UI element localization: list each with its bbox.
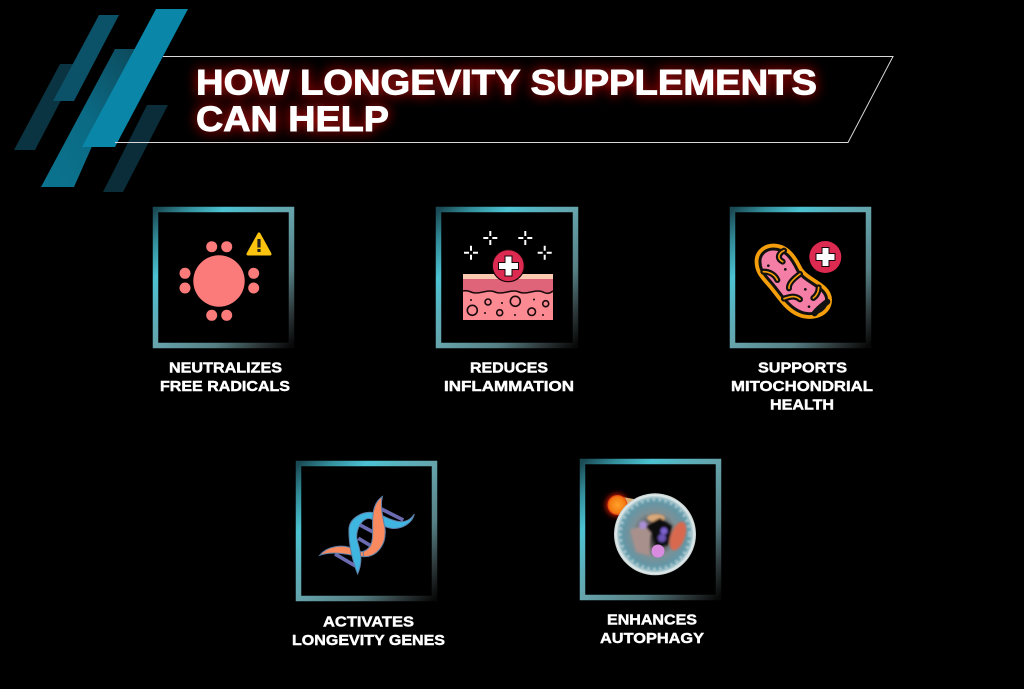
label: ENHANCES (607, 612, 697, 628)
decorative teal stripes (14, 9, 188, 192)
icon: mitochondrion (760, 249, 827, 314)
label: HEALTH (770, 396, 834, 414)
label (292, 614, 445, 649)
icon: medical cross badge (809, 241, 841, 273)
title: HOW LONGEVITY SUPPLEMENTS (196, 64, 817, 102)
label: LONGEVITY GENES (292, 632, 445, 649)
label: REDUCES (470, 360, 548, 376)
frame 1 (156, 210, 292, 346)
label (731, 360, 873, 414)
label: MITOCHONDRIAL (731, 378, 873, 395)
label: FREE RADICALS (160, 378, 290, 395)
panel: neutralizes free radicals (156, 210, 292, 395)
title: HOW LONGEVITY SUPPLEMENTS (196, 64, 817, 102)
title: CAN HELP (196, 100, 389, 139)
panel: supports mitochondrial health (731, 210, 873, 414)
title (196, 64, 817, 139)
icon: DNA helix (320, 497, 414, 574)
frame 2 (438, 210, 576, 346)
icon: skin layers (463, 274, 553, 320)
icon: free radical (180, 241, 259, 321)
label: SUPPORTS (758, 360, 847, 376)
label: NEUTRALIZES (169, 360, 282, 376)
icon: autophagy cell (606, 493, 696, 575)
label (160, 360, 290, 395)
panel: enhances autophagy (582, 462, 718, 647)
label: AUTOPHAGY (600, 630, 704, 647)
frame 3 (732, 210, 868, 346)
label: ACTIVATES (323, 614, 414, 630)
frame 5 (582, 462, 718, 598)
title banner outline (115, 56, 893, 142)
panel: reduces inflammation (438, 210, 576, 395)
panel: activates longevity genes (292, 464, 445, 649)
title: CAN HELP (196, 100, 389, 139)
icon: medical cross badge (492, 250, 524, 282)
label (444, 360, 574, 395)
icon: sparkles (464, 231, 552, 260)
label: INFLAMMATION (444, 378, 574, 395)
frame 4 (298, 464, 434, 598)
label (600, 612, 704, 647)
icon: warning triangle (248, 234, 270, 254)
